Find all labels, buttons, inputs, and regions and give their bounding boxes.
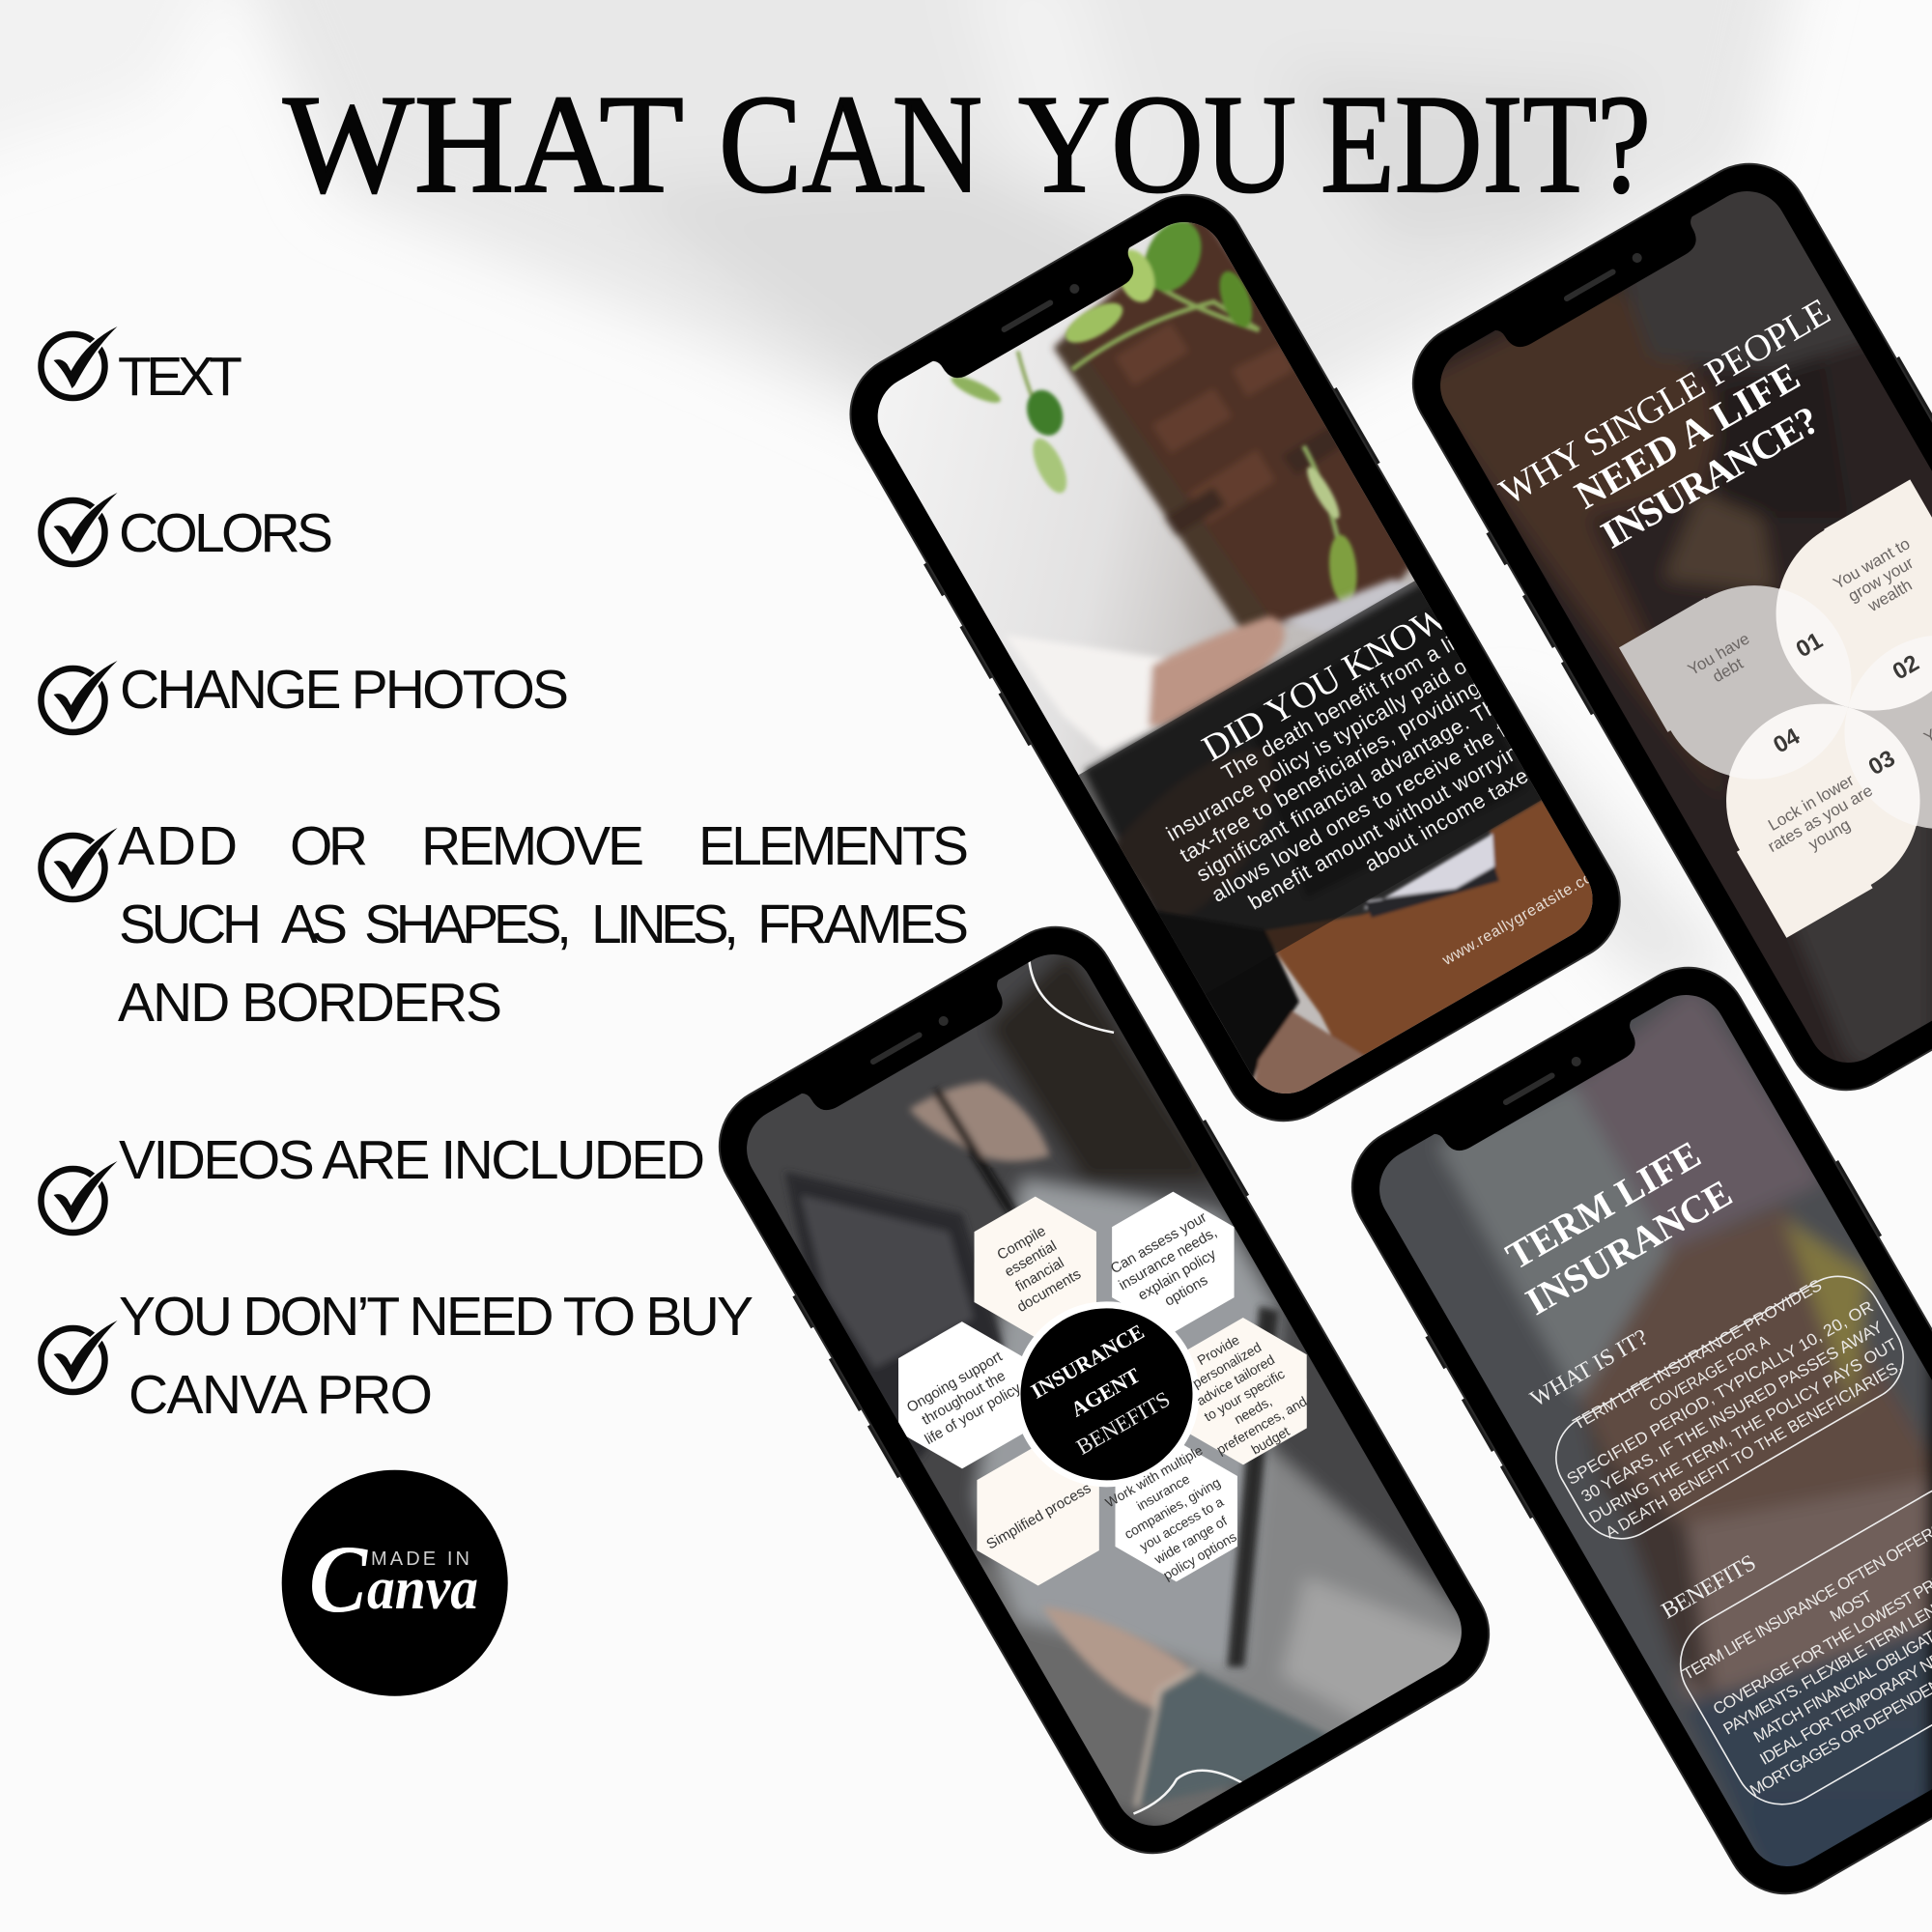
item: add or remove elements: REMOVE	[421, 815, 644, 877]
hexagon labels: Can assess your	[1108, 1209, 1209, 1277]
body text: insurance policy is typically paid out	[1162, 643, 1488, 846]
subheading: what is it: WHAT IS IT?	[1526, 1324, 1653, 1412]
hexagon labels: life of your policy	[923, 1379, 1024, 1448]
hexagon labels: advice tailored	[1194, 1351, 1277, 1408]
item: add or remove elements: SUCH	[119, 894, 262, 955]
body text: significant financial advantage. This	[1192, 686, 1517, 887]
body text: tax-free to beneficiaries, providing a	[1176, 665, 1501, 867]
hexagon labels: throughout the	[920, 1368, 1009, 1429]
badge: made in canva: MADE IN	[371, 1548, 469, 1570]
hexagon labels: financial	[1012, 1255, 1067, 1295]
badge: made in canva: anva	[367, 1556, 478, 1622]
item: colors	[41, 493, 333, 564]
step numbers: 01	[1792, 628, 1827, 663]
subheading: benefits: BENEFITS	[1658, 1550, 1760, 1624]
decorative white arcs	[1029, 956, 1244, 1814]
hexagon labels: options	[1162, 1272, 1210, 1310]
sleeve and hand	[1005, 579, 1430, 752]
dark info band	[1079, 581, 1542, 994]
hexagon diagram: BENEFITS	[1072, 1387, 1174, 1460]
outlined box: what is it: A DEATH BENEFIT TO THE BENEFICIARIES.	[1603, 1356, 1905, 1542]
body text: about income taxes	[1360, 757, 1543, 876]
heading: why single people: NEED A LIFE	[1567, 354, 1807, 518]
item: text: TEXT	[118, 346, 242, 408]
heading: term life insurance: INSURANCE	[1519, 1171, 1739, 1323]
hexagon labels: budget	[1248, 1423, 1293, 1458]
item: no canva pro: YOU DON’T NEED TO BUY	[119, 1286, 753, 1348]
petal labels: rates as you are	[1765, 781, 1876, 856]
outlined box: what is it	[1537, 1256, 1919, 1554]
body text: allows loved ones to receive the full	[1208, 706, 1530, 907]
item: text	[41, 327, 242, 408]
website: www.reallygreatsite.com	[1439, 863, 1607, 969]
item: add or remove elements	[41, 815, 969, 1034]
photo: desk with plant	[801, 160, 1663, 1146]
heading: term life insurance: TERM LIFE	[1498, 1132, 1708, 1278]
outlined box: what is it: SPECIFIED PERIOD, TYPICALLY 10, 20, OR	[1564, 1297, 1877, 1489]
badge: made in canva	[282, 1470, 508, 1696]
hexagon labels: documents	[1014, 1266, 1084, 1316]
step numbers: 04	[1769, 723, 1804, 758]
hexagon labels: explain policy	[1135, 1246, 1219, 1304]
checklist	[41, 327, 969, 1426]
hexagon labels: to your specific	[1202, 1366, 1287, 1424]
hexagon labels: Compile	[994, 1223, 1049, 1264]
petal labels: You want to	[1831, 534, 1913, 593]
outlined box: benefits	[1662, 1468, 1932, 1822]
hexagon labels: insurance	[1134, 1470, 1192, 1514]
hexagon labels: you access to a	[1137, 1493, 1226, 1554]
notch	[794, 974, 1019, 1122]
outlined box: benefits: MOST	[1827, 1587, 1875, 1626]
item: change photos: CHANGE PHOTOS	[120, 659, 569, 721]
title: WHAT	[283, 66, 684, 222]
heading: why single people: INSURANCE?	[1594, 397, 1827, 557]
hexagon labels: policy options	[1160, 1528, 1239, 1583]
hexagon diagram: AGENT	[1066, 1363, 1145, 1422]
outlined box: what is it: DURING THE TERM, THE POLICY PAYS OUT	[1586, 1335, 1900, 1527]
step numbers	[1774, 634, 1920, 774]
hexagon labels	[861, 1149, 1356, 1652]
photo: brown sweater	[1440, 191, 1932, 1063]
item: add or remove elements: ELEMENTS	[698, 815, 969, 877]
table, laptop edge, arm	[1157, 800, 1592, 1094]
phone: did you know	[849, 162, 1932, 1122]
phone: insurance agent benefits	[719, 925, 1490, 1855]
keyboard and hand beneath band	[1084, 573, 1614, 974]
item: add or remove elements: AS	[281, 894, 348, 955]
petal diagram	[1619, 479, 1932, 938]
item: add or remove elements: FRAMES	[757, 894, 969, 955]
petal labels: young	[1805, 815, 1854, 854]
item: videos included: VIDEOS ARE INCLUDED	[119, 1129, 705, 1191]
center circle	[980, 1267, 1234, 1520]
item: no canva pro: CANVA PRO	[128, 1364, 433, 1426]
hexagon labels: Work with multiple	[1102, 1442, 1206, 1510]
title: CAN	[719, 66, 982, 222]
phone: term life insurance	[920, 700, 1932, 1932]
heading: why single people: WHY SINGLE PEOPLE	[1492, 291, 1837, 513]
item: add or remove elements: OR	[290, 815, 368, 877]
hexagon labels: Provide	[1194, 1332, 1242, 1368]
outlined box: what is it: 30 YEARS. IF THE INSURED PASSES AWAY	[1578, 1318, 1886, 1506]
body text	[1165, 636, 1528, 910]
item: add or remove elements: ADD	[118, 815, 238, 877]
body text: The death benefit from a life	[1217, 622, 1475, 785]
hexagon labels: Ongoing support	[904, 1348, 1006, 1416]
hexagon labels: Simplified process	[983, 1480, 1094, 1553]
hexagon labels: insurance needs,	[1116, 1224, 1220, 1293]
body text: benefit amount without worrying	[1244, 733, 1534, 915]
photo: clipboard on desk	[747, 954, 1462, 1826]
petal labels: debt	[1710, 654, 1747, 686]
phone: why single people	[1412, 162, 1932, 1092]
heading: did you know: DID YOU KNOW?	[1196, 588, 1469, 769]
badge: made in canva: C	[309, 1525, 368, 1633]
hexagon labels: companies, giving	[1122, 1474, 1223, 1542]
hexagon diagram	[831, 1118, 1374, 1664]
item: add or remove elements: LINES,	[591, 894, 739, 955]
item: colors: COLORS	[119, 502, 333, 564]
outlined box: what is it: TERM LIFE INSURANCE PROVIDES	[1570, 1276, 1825, 1434]
notch	[925, 242, 1151, 390]
title: YOU	[1018, 66, 1296, 222]
hexagon labels: needs,	[1232, 1393, 1274, 1427]
item: add or remove elements: AND BORDERS	[118, 972, 502, 1034]
petal labels	[1687, 541, 1932, 853]
notch	[1488, 211, 1713, 359]
hexagon labels: essential	[1002, 1237, 1060, 1280]
petal labels: Lock in lower	[1765, 771, 1858, 835]
notch	[1427, 1014, 1652, 1163]
hexagon labels: wide range of	[1151, 1513, 1230, 1567]
petal labels: grow your	[1845, 554, 1917, 606]
hexagon diagram: INSURANCE	[1027, 1320, 1149, 1404]
hexagon labels: personalized	[1190, 1339, 1264, 1391]
item: videos included	[41, 1129, 705, 1233]
step numbers: 03	[1864, 745, 1899, 781]
step numbers: 02	[1889, 650, 1923, 685]
plant	[949, 212, 1359, 605]
petal labels: You have	[1685, 629, 1752, 679]
title	[283, 66, 1651, 222]
photo: hands	[1331, 961, 1932, 1910]
hexagon labels: preferences, and	[1214, 1393, 1310, 1458]
outlined box: what is it: COVERAGE FOR A	[1646, 1331, 1773, 1415]
item: no canva pro	[41, 1286, 753, 1426]
petal labels: wealth	[1864, 576, 1916, 615]
item: add or remove elements: SHAPES,	[364, 894, 572, 955]
title: EDIT?	[1321, 66, 1651, 222]
